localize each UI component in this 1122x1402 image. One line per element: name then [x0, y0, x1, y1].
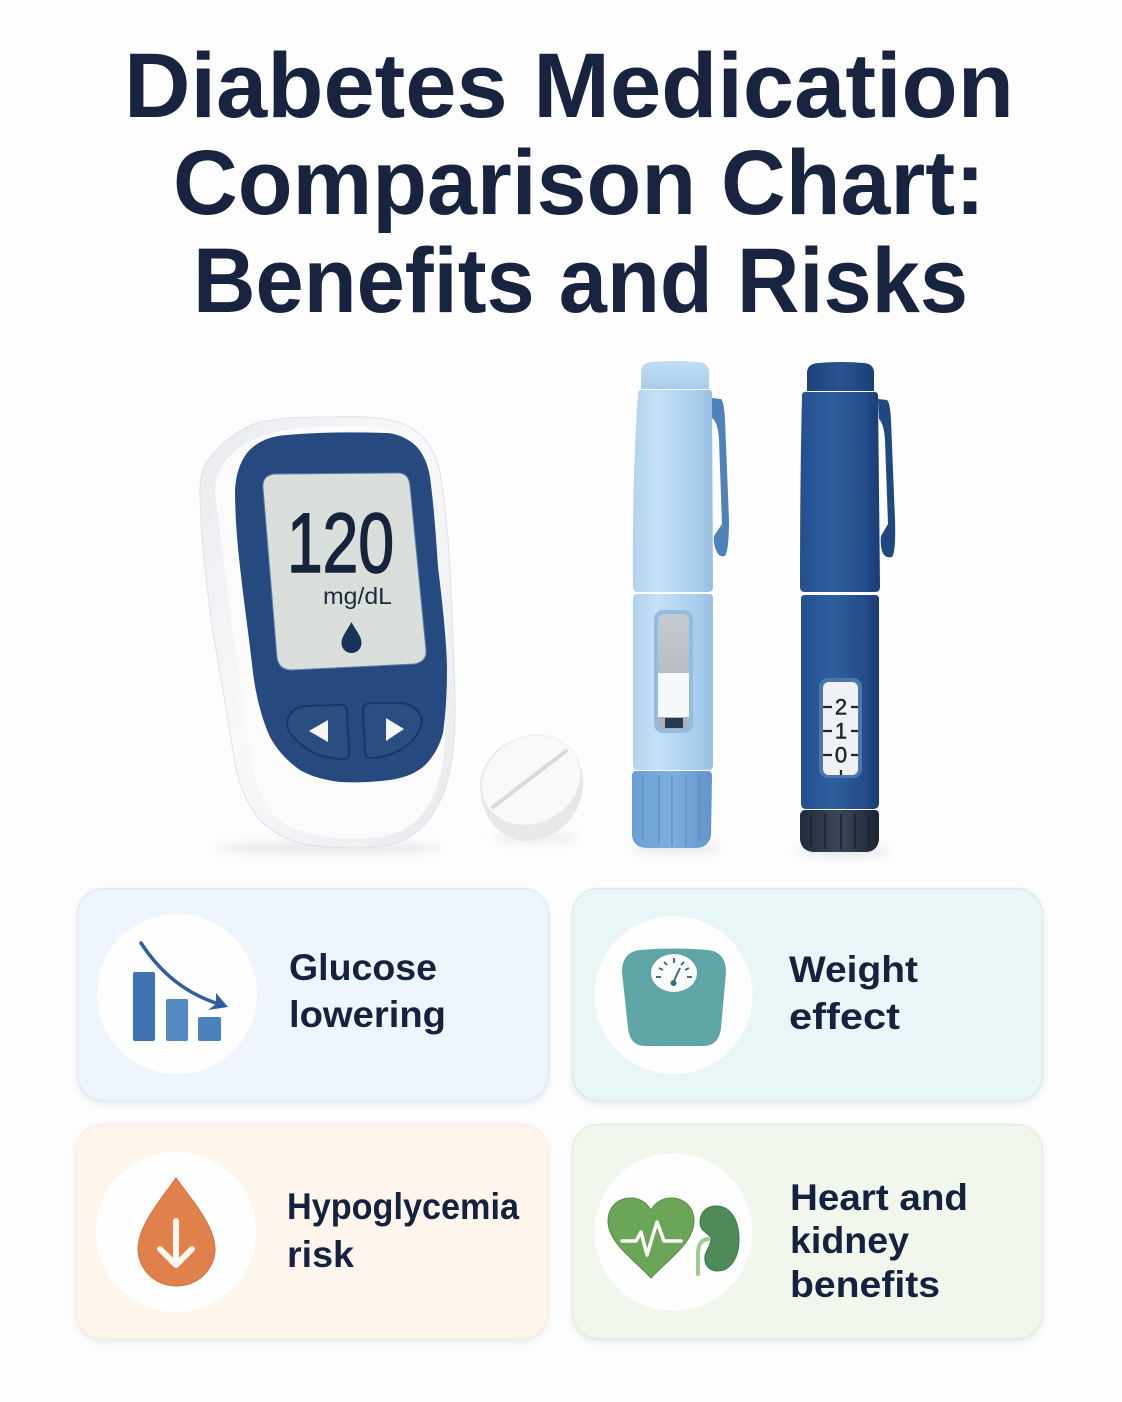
label: Glucose: [289, 947, 437, 988]
illustration: light blue injection pen: [629, 361, 729, 851]
dose window: 0: [835, 742, 847, 768]
panel: glucose lowering: [78, 888, 548, 1100]
meter screen: [263, 473, 426, 670]
panel: hypoglycemia risk: [76, 1124, 548, 1338]
label: Heart and: [790, 1177, 968, 1218]
meter face panel: [235, 432, 447, 782]
screen reading: 120: [287, 496, 394, 590]
illustration: dark blue injection pen: [794, 362, 895, 854]
pen dose knob: [800, 810, 879, 852]
cartridge window: [654, 610, 693, 733]
pen clip: [712, 398, 729, 556]
pen clip: [878, 399, 895, 557]
label: kidney: [790, 1220, 909, 1261]
icon: drop with down arrow: [96, 1152, 256, 1312]
panel: weight effect: [572, 888, 1042, 1100]
panel: heart and kidney benefits: [572, 1124, 1042, 1338]
label: benefits: [790, 1264, 940, 1305]
illustration: tablet: [466, 718, 596, 842]
label: Hypoglycemia: [287, 1186, 519, 1227]
icon: heart and kidney: [594, 1153, 752, 1311]
label: Weight: [789, 949, 918, 990]
right button: [363, 703, 422, 758]
pen dose knob: [632, 771, 712, 848]
label: [789, 949, 918, 1037]
pen lower barrel: [633, 594, 713, 770]
label: effect: [789, 996, 900, 1037]
title: Diabetes Medication: [124, 35, 1014, 137]
meter casing: [200, 417, 455, 848]
title: [124, 35, 1014, 332]
left button: [287, 705, 349, 759]
label: [287, 1186, 519, 1275]
icon: screen drop: [342, 622, 362, 653]
dose window: 2: [835, 694, 847, 720]
dose window: 1: [835, 718, 847, 744]
screen unit: mg/dL: [323, 583, 392, 609]
label: risk: [287, 1234, 354, 1275]
pen cap: [641, 361, 709, 389]
pen upper barrel: [800, 392, 880, 592]
illustration: glucose meter: [200, 417, 455, 852]
pen lower barrel: [801, 595, 879, 809]
label: [289, 947, 446, 1035]
label: [790, 1177, 968, 1305]
label: lowering: [289, 994, 446, 1035]
icon: bathroom scale: [594, 916, 752, 1074]
pen upper barrel: [633, 390, 713, 592]
title: Comparison Chart:: [173, 132, 985, 234]
dose window: [819, 678, 862, 778]
icon: glucose bars with falling arrow: [97, 914, 257, 1074]
pen cap: [807, 362, 874, 391]
casing bevel highlight: [215, 426, 445, 839]
title: Benefits and Risks: [193, 230, 968, 332]
